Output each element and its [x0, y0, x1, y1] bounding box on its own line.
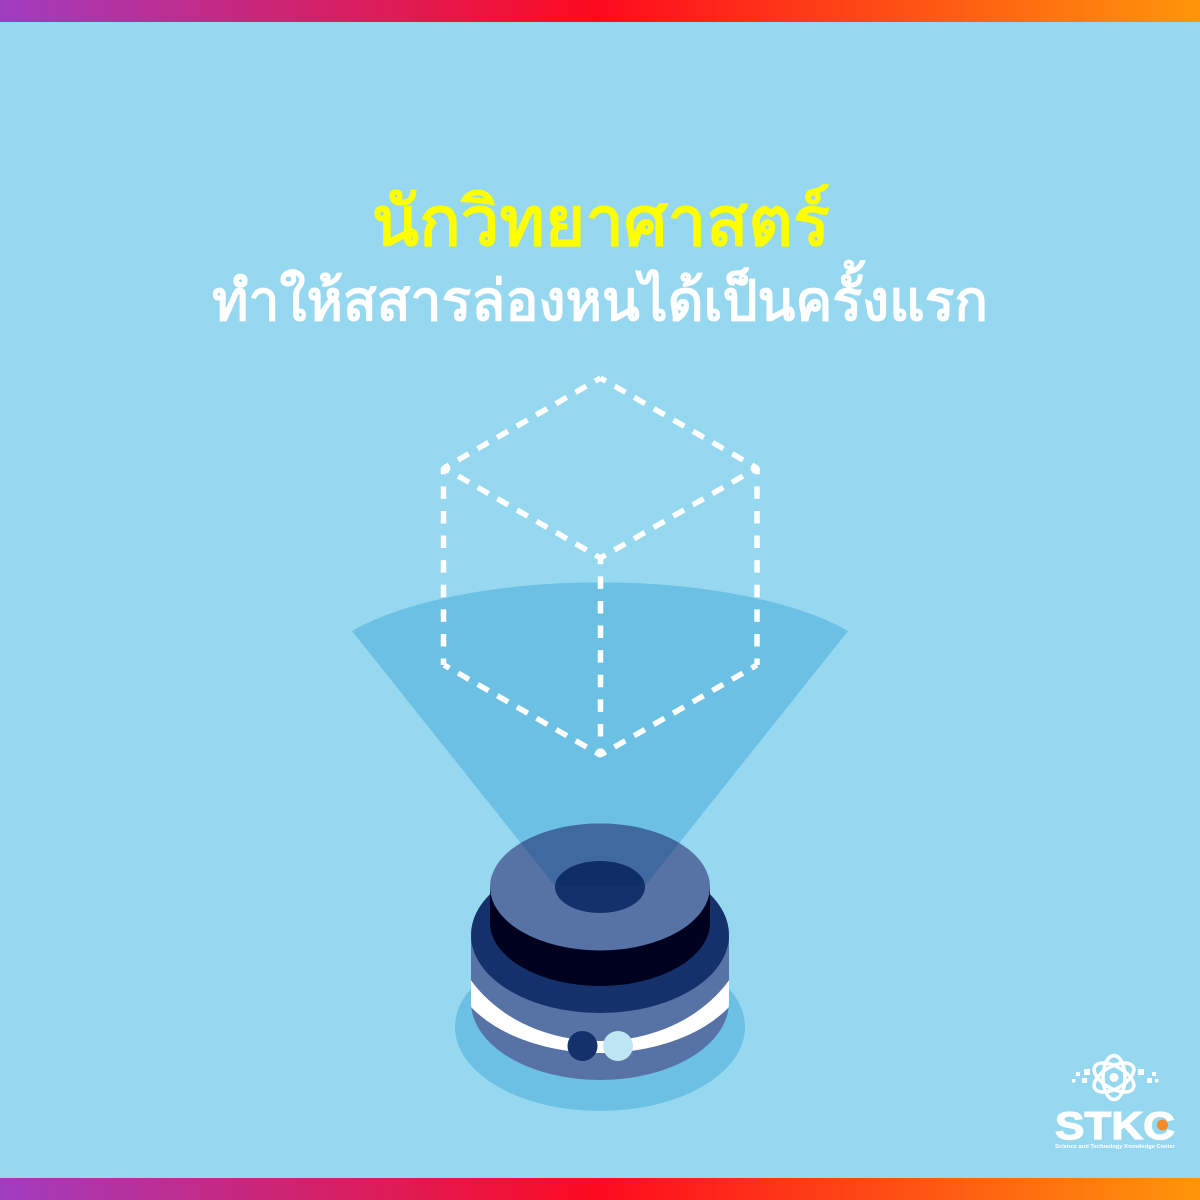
top gradient bar [0, 0, 1200, 22]
device white band [471, 980, 729, 1053]
hologram projector device [471, 824, 729, 1080]
subtitle: white heading: ทำให้สสารล่องหนได้เป็นครั้งแรก [212, 260, 988, 332]
beam over lens [555, 861, 645, 886]
device base side [471, 935, 729, 1080]
pale indicator light [603, 1031, 633, 1061]
logo tagline: Science and Technology Knowledge Center [1055, 1144, 1176, 1150]
projection beam [352, 582, 848, 886]
device upper top face [490, 824, 710, 950]
title: yellow heading: นักวิทยาศาสตร์ [372, 184, 830, 260]
logo: STKC [1055, 1056, 1176, 1150]
dark indicator light [568, 1031, 598, 1061]
logo orange dot [1157, 1120, 1168, 1130]
device upper side [490, 887, 710, 986]
icon: dashed invisible cube [442, 378, 759, 756]
logo atom icon [1089, 1056, 1139, 1100]
device lens [555, 861, 645, 913]
shadow under device [455, 943, 745, 1111]
logo wordmark: STKC [1055, 1105, 1175, 1148]
bottom gradient bar [0, 1178, 1200, 1200]
beam over device face [521, 824, 679, 886]
logo pixel squares [1072, 1069, 1158, 1083]
device base top face [471, 857, 729, 1013]
